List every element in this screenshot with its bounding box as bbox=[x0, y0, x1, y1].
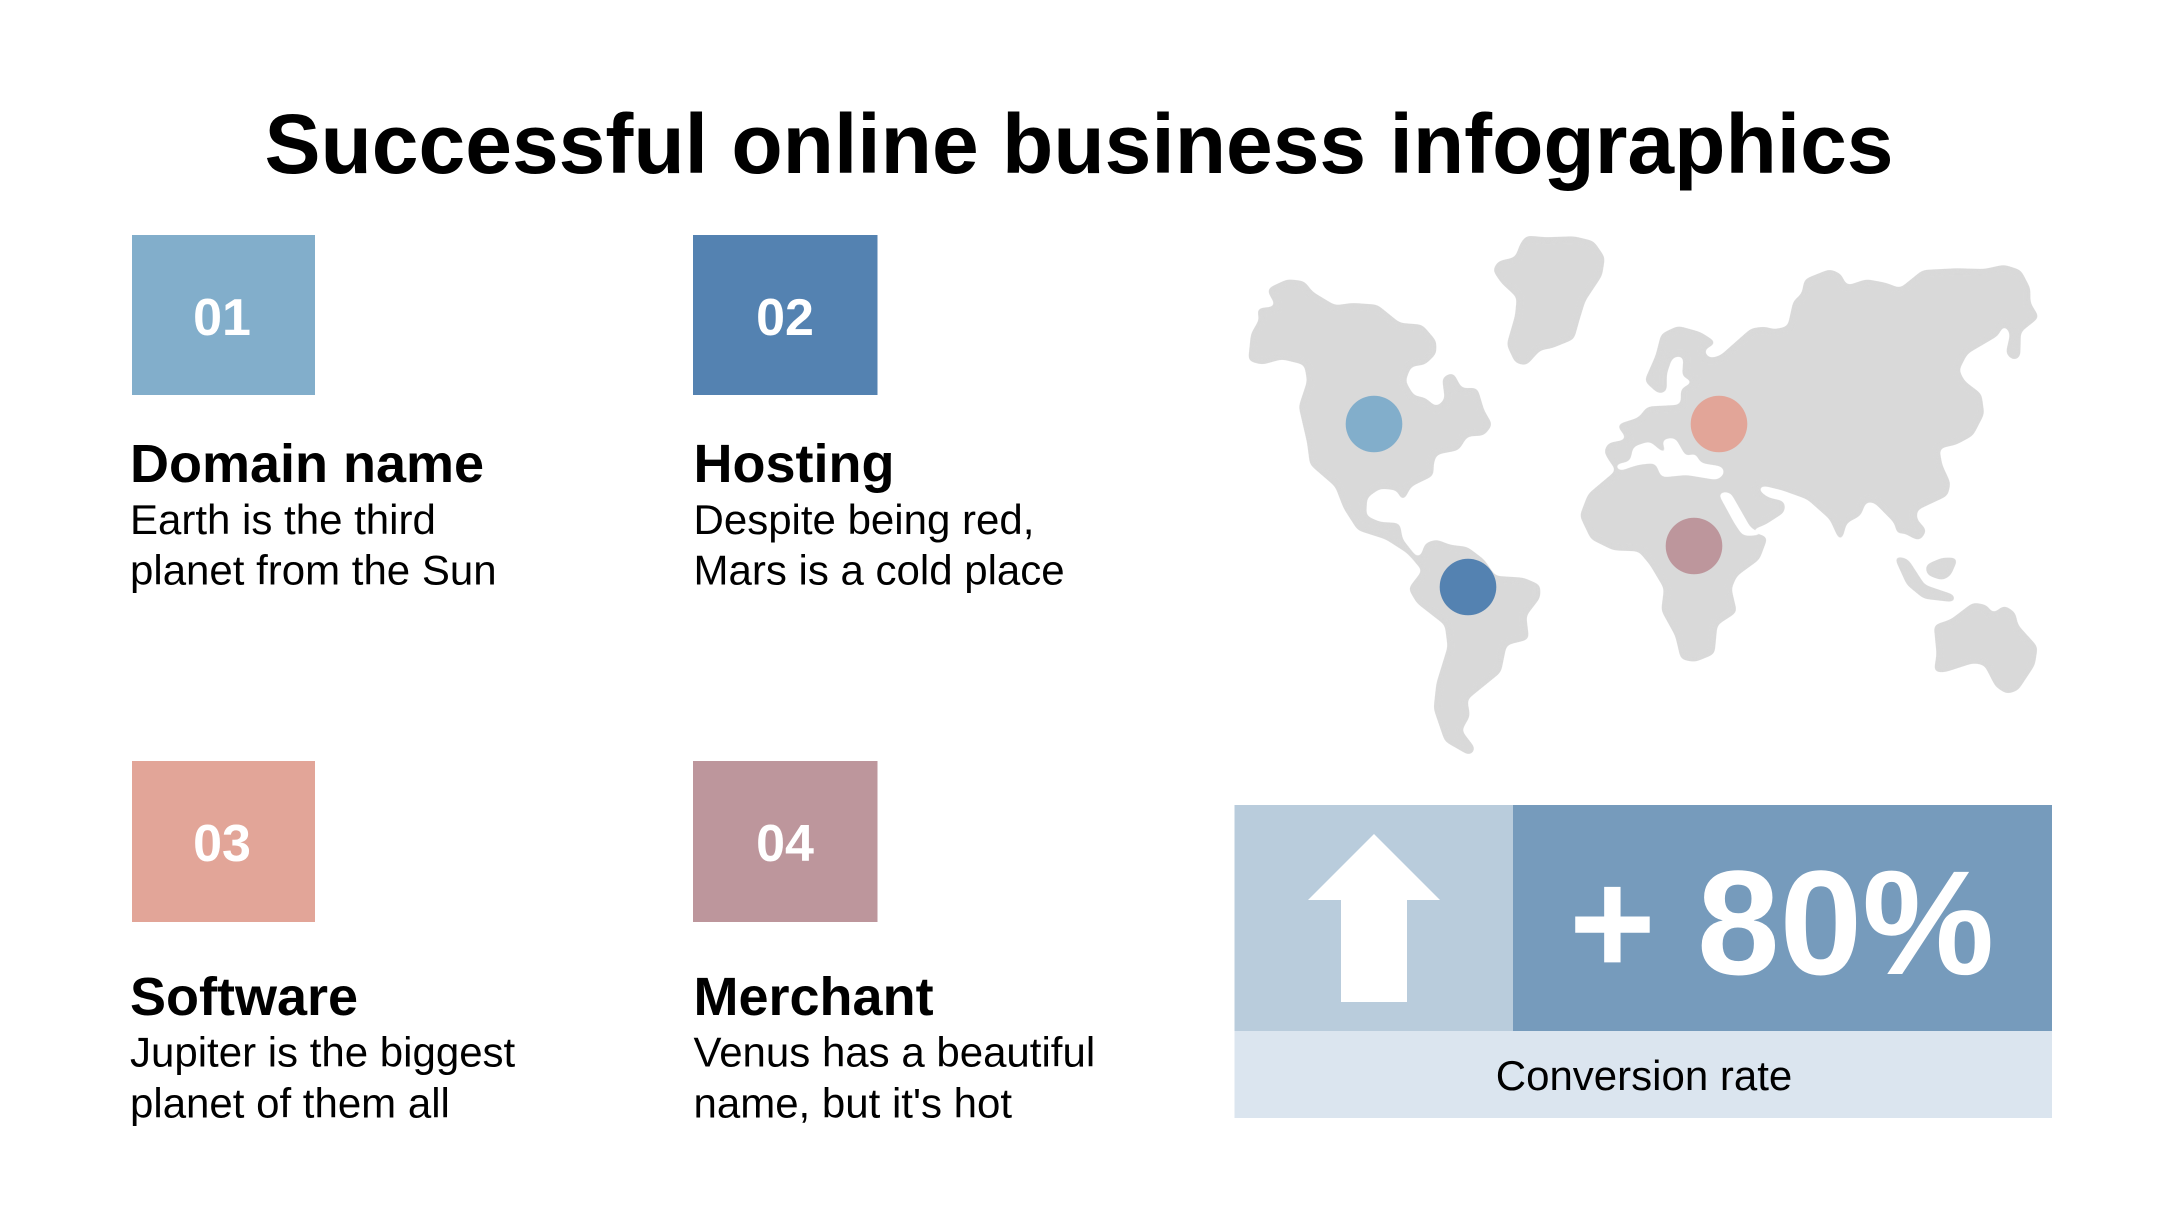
item 01: domain name bbox=[130, 235, 497, 594]
number box 02: 02 bbox=[756, 289, 814, 347]
description: hosting: Mars is a cold place bbox=[694, 546, 1065, 594]
caption: conversion rate: Conversion rate bbox=[1496, 1052, 1792, 1099]
description: domain name: planet from the Sun bbox=[130, 546, 497, 594]
number box 03 bbox=[132, 761, 315, 922]
number box 04: 04 bbox=[756, 815, 814, 873]
number box 04 bbox=[693, 761, 878, 922]
heading: hosting: Hosting bbox=[694, 434, 894, 494]
description: merchant: Venus has a beautiful bbox=[694, 1028, 1095, 1076]
title: Successful online business infographics bbox=[264, 97, 1894, 191]
heading: merchant: Merchant bbox=[694, 967, 934, 1027]
panel: caption background bbox=[1234, 1031, 2052, 1118]
description: software: Jupiter is the biggest bbox=[130, 1028, 516, 1076]
heading: domain name: Domain name bbox=[130, 434, 484, 494]
number box 02 bbox=[693, 235, 878, 395]
number box 01: 01 bbox=[193, 289, 251, 347]
marker: mauve bbox=[1666, 518, 1722, 574]
description: merchant: name, but it's hot bbox=[694, 1080, 1012, 1126]
item 04: merchant bbox=[693, 761, 1095, 1126]
description: domain name: Earth is the third bbox=[130, 496, 436, 543]
item 03: software bbox=[130, 761, 516, 1126]
map: continents bbox=[1248, 235, 2039, 756]
panel: arrow background bbox=[1234, 805, 1514, 1031]
heading: software: Software bbox=[130, 967, 358, 1027]
value: +80%: + 80% bbox=[1569, 841, 1994, 1006]
number box 01 bbox=[132, 235, 315, 395]
marker: dark blue bbox=[1440, 559, 1496, 615]
marker: salmon bbox=[1691, 396, 1747, 452]
marker: light blue bbox=[1346, 396, 1402, 452]
description: hosting: Despite being red, bbox=[694, 496, 1034, 543]
panel: value background bbox=[1513, 805, 2052, 1031]
icon: up arrow bbox=[1308, 834, 1440, 1002]
description: software: planet of them all bbox=[130, 1080, 450, 1126]
panel: conversion rate bbox=[1234, 805, 2052, 1118]
world map with location markers bbox=[1248, 235, 2039, 756]
number box 03: 03 bbox=[193, 815, 251, 873]
item 02: hosting bbox=[693, 235, 1065, 594]
